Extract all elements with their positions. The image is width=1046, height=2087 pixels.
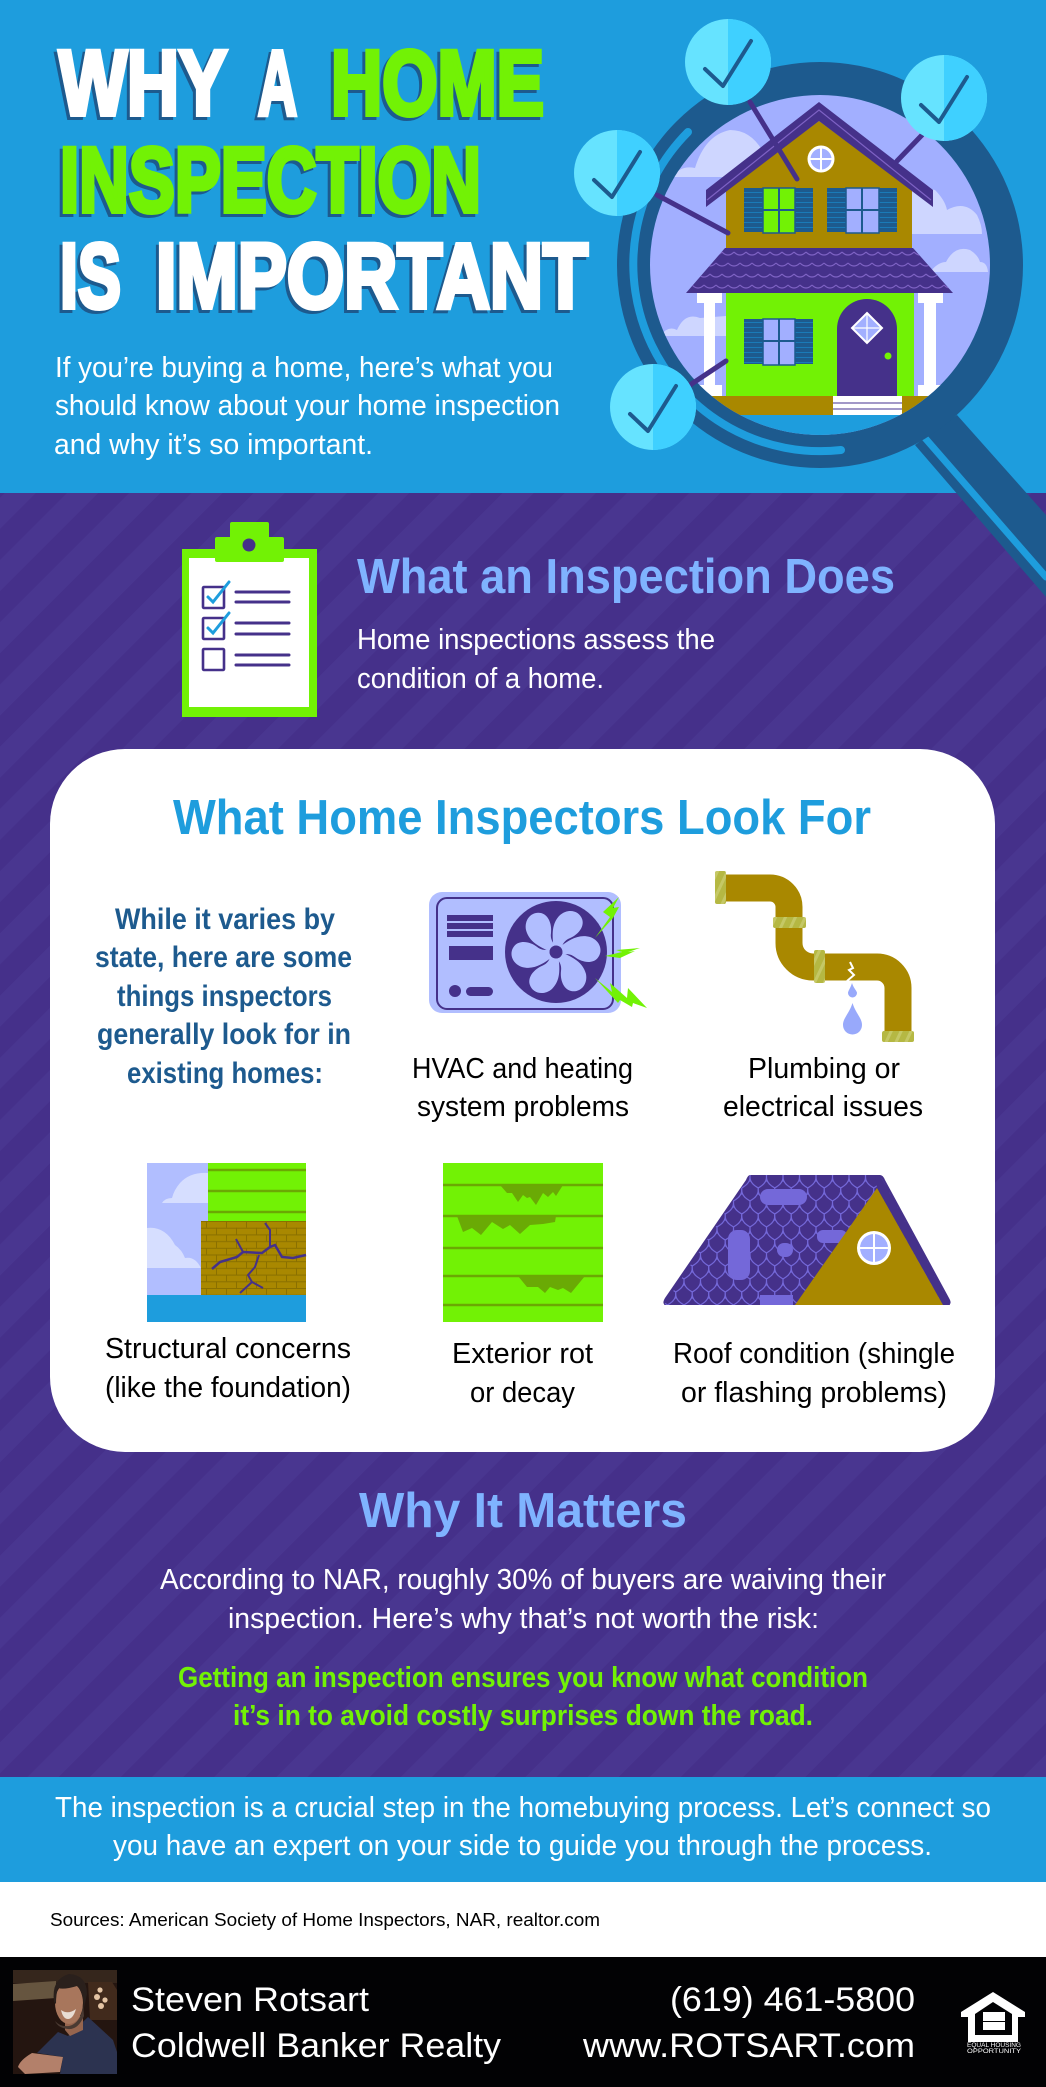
title: IS [60, 226, 121, 328]
caption: roof: or flashing problems) [681, 1377, 947, 1409]
steps [833, 396, 902, 415]
check badge: right [901, 55, 987, 141]
intro paragraph: generally look for in [97, 1018, 351, 1051]
paragraph: According to NAR, roughly 30% of buyers are waiving their [160, 1564, 886, 1596]
panel: what home inspectors look for [50, 749, 995, 1452]
green callout: it’s in to avoid costly surprises down the road. [233, 1700, 813, 1732]
caption: exterior: Exterior rot [452, 1338, 593, 1370]
caption: plumbing [723, 1053, 923, 1123]
check badge: left [574, 130, 660, 216]
green lower storey [726, 293, 914, 396]
panel: call to action band: you have an expert on your side to guide you through the process. [113, 1830, 932, 1862]
caption: plumbing: electrical issues [723, 1091, 923, 1123]
title: WHY [59, 32, 227, 134]
heading: Why It Matters [359, 1484, 687, 1538]
contact details [582, 1981, 915, 2065]
caption: roof: Roof condition (shingle [673, 1338, 955, 1370]
panel: call to action band: The inspection is a crucial step in the homebuying process. Let’s connect so [55, 1792, 991, 1824]
icon: equal housing opportunity: EQUAL HOUSING [967, 2042, 1021, 2049]
caption: exterior [452, 1338, 593, 1409]
panel: call to action band [0, 1777, 1046, 1882]
upper roof [706, 102, 933, 207]
icon: leaking pipe [715, 871, 914, 1042]
heading: What an Inspection Does [357, 550, 895, 604]
intro text: should know about your home inspection [55, 390, 560, 422]
description: Home inspections assess the [357, 624, 715, 656]
icon: hvac unit [429, 892, 647, 1013]
caption: structural: Structural concerns [105, 1333, 351, 1365]
agent name: Steven Rotsart [131, 1981, 370, 2019]
intro paragraph [95, 903, 352, 1090]
title [59, 32, 588, 328]
panel: purple striped background [0, 493, 1046, 1777]
icon: equal housing opportunity [961, 1992, 1025, 2055]
agent name: Coldwell Banker Realty [131, 2027, 501, 2065]
window: upper right [827, 188, 897, 233]
intro text [54, 352, 560, 461]
handle [915, 415, 1046, 597]
check badge: bottom [610, 364, 696, 450]
agent name [131, 1981, 501, 2065]
window: lower [744, 319, 813, 365]
title: HOME [331, 32, 544, 134]
section: why it matters [160, 1484, 886, 1732]
check badge: top [685, 19, 771, 105]
panel: footer [0, 1957, 1046, 2087]
window: upper left green [744, 188, 813, 233]
caption: structural [105, 1333, 351, 1404]
caption: hvac: system problems [417, 1091, 629, 1123]
icon: damaged roof [650, 1175, 951, 1305]
title: INSPECTION [60, 130, 481, 232]
agent photo [13, 1970, 117, 2074]
section: what an inspection does [357, 550, 895, 695]
description: condition of a home. [357, 663, 604, 695]
lens ring [617, 62, 1023, 468]
pillars [697, 293, 943, 396]
door [837, 299, 897, 396]
icon: exterior rot siding [443, 1163, 603, 1322]
title: A [258, 32, 297, 134]
panel: blue header background [0, 0, 1046, 493]
caption: plumbing: Plumbing or [748, 1053, 900, 1085]
intro paragraph: existing homes: [127, 1057, 323, 1090]
lower roof [686, 248, 953, 293]
upper storey [726, 121, 912, 248]
icon: clipboard [182, 522, 317, 717]
paragraph [160, 1564, 886, 1635]
green callout [178, 1662, 868, 1732]
caption: roof [673, 1338, 955, 1409]
magnifying glass illustration [574, 19, 1046, 597]
caption: hvac: HVAC and heating [412, 1053, 633, 1085]
title: IMPORTANT [156, 226, 588, 328]
paragraph: inspection. Here’s why that’s not worth the risk: [228, 1603, 819, 1635]
intro paragraph: state, here are some [95, 941, 352, 974]
icon: equal housing opportunity: OPPORTUNITY [967, 2048, 1022, 2055]
contact details: (619) 461-5800 [670, 1981, 915, 2019]
intro text: If you’re buying a home, here’s what you [55, 352, 553, 384]
panel: sources: Sources: American Society of Home Inspectors, NAR, realtor.com [50, 1910, 600, 1930]
panel: sources [0, 1882, 1046, 1957]
caption: exterior: or decay [470, 1377, 575, 1409]
description [357, 624, 715, 695]
caption: hvac [412, 1053, 633, 1123]
intro text: and why it’s so important. [54, 429, 373, 461]
callout lines [657, 102, 922, 385]
lens glass with house [640, 90, 1000, 445]
caption: structural: (like the foundation) [105, 1372, 351, 1404]
intro paragraph: While it varies by [115, 903, 335, 936]
attic window [808, 146, 834, 172]
intro paragraph: things inspectors [117, 980, 332, 1013]
icon: cracked foundation [147, 1163, 306, 1322]
contact details: www.ROTSART.com [582, 2027, 915, 2065]
green callout: Getting an inspection ensures you know what condition [178, 1662, 868, 1694]
panel heading: What Home Inspectors Look For [173, 791, 871, 845]
